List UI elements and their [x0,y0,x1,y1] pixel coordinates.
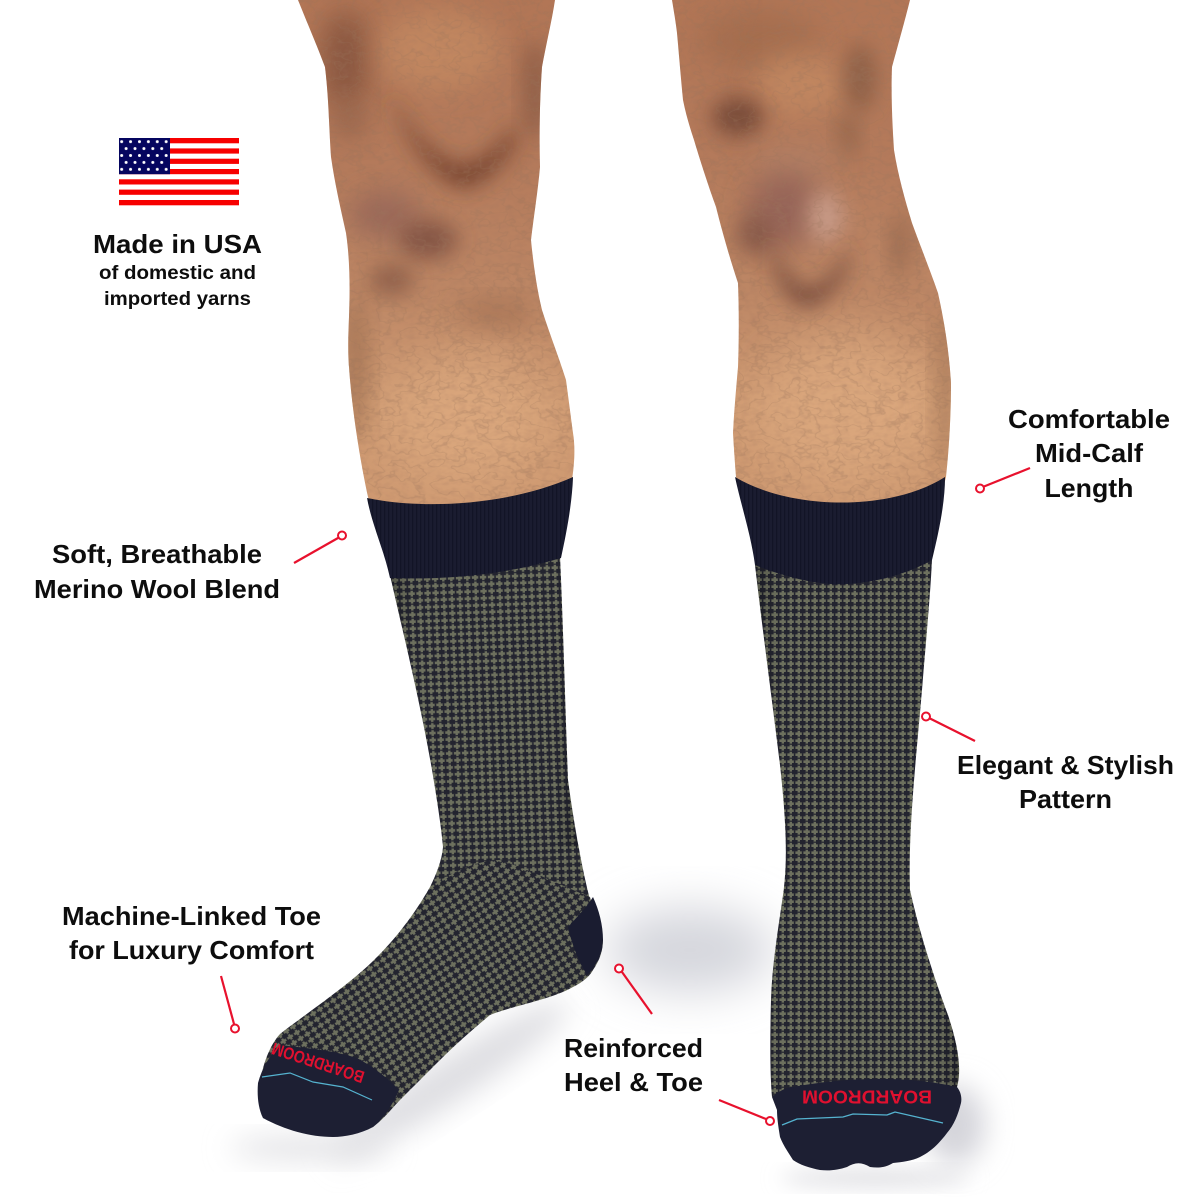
left sock cuff [367,477,573,578]
text: Made in USA: Made in USA [93,229,262,259]
right toe logo: BOARDROOM [802,1086,932,1106]
right leg [672,0,951,502]
callout: machine-linked toe: for Luxury Comfort [69,935,314,965]
callout: reinforced heel and toe: Heel & Toe [564,1067,703,1097]
callout: merino wool: Soft, Breathable [52,539,262,569]
callout: mid-calf length: Length [1044,473,1134,503]
callout: stylish pattern: Elegant & Stylish [957,750,1174,780]
callout: mid-calf length: Mid-Calf [1035,438,1143,468]
callout: reinforced heel and toe: Reinforced [564,1033,703,1063]
left sock [258,477,603,1137]
callout: stylish pattern: Pattern [1019,784,1112,814]
US flag [119,138,239,205]
callout: merino wool: Merino Wool Blend [34,574,280,604]
left sock foot [260,860,603,1137]
right sock cuff [735,477,945,584]
right sock [735,477,961,1170]
callout: stylish pattern [922,712,1174,814]
floor shadows [230,908,985,1186]
text: Made in USA [93,229,262,310]
callout: mid-calf length [976,404,1170,503]
left sock toe [258,1045,399,1137]
callout: mid-calf length: Comfortable [1008,404,1170,434]
left sock heel [568,897,603,975]
text: Made in USA: imported yarns [104,289,251,310]
right toe stitch line [782,1112,943,1125]
right sock shading [755,560,959,1097]
left sock shading [390,556,578,847]
left sock ankle [390,556,590,900]
callout: merino wool [34,532,346,604]
callout: machine-linked toe [62,901,321,1032]
right sock body [755,560,959,1097]
text: Made in USA: of domestic and [99,263,256,284]
callout: machine-linked toe: Machine-Linked Toe [62,901,321,931]
left toe stitch line [262,1073,372,1100]
left toe logo: BOARDROOM [270,1039,367,1086]
right sock toe [772,1079,961,1170]
left leg [298,0,574,504]
callout: reinforced heel and toe [564,964,774,1125]
